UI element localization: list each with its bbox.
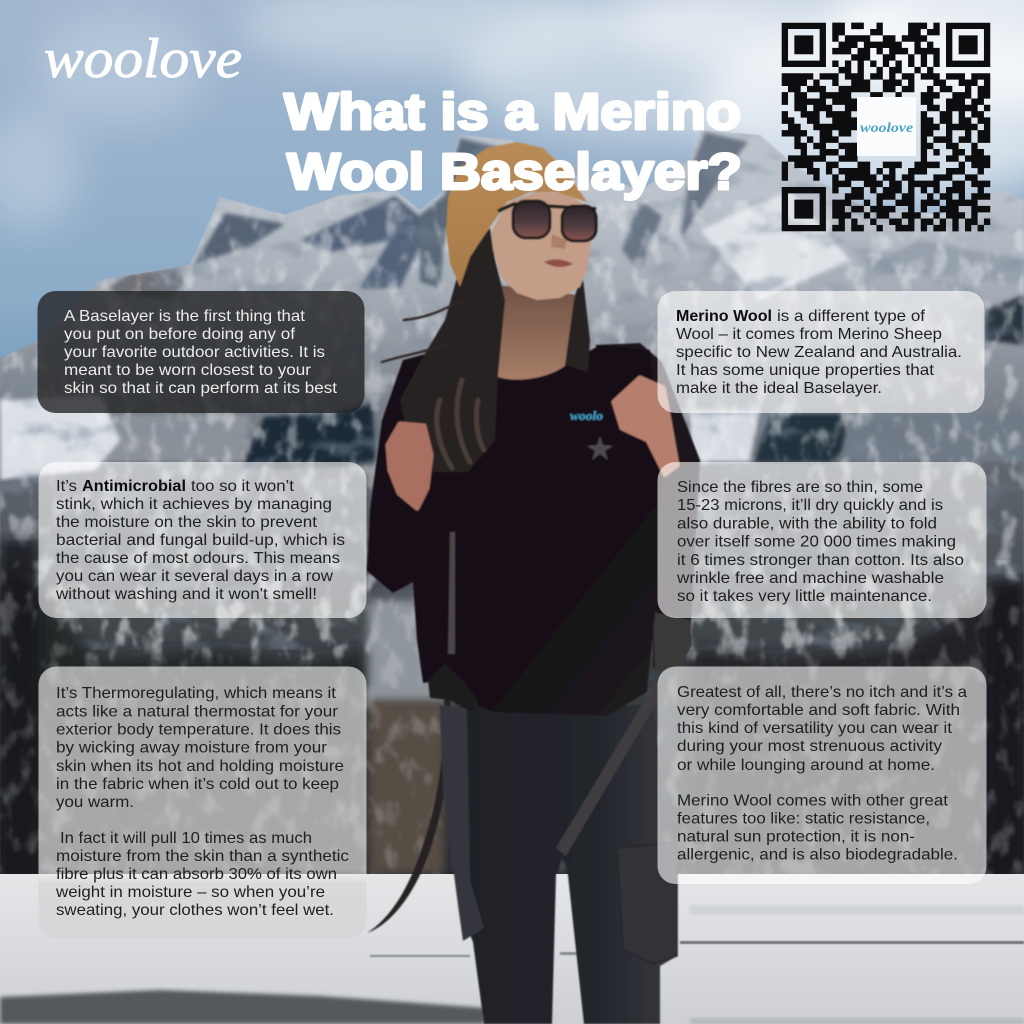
side pack strap [448,532,455,654]
mountains [0,130,1024,880]
panel: thermoregulating: exterior body temperature. It does this [56,722,341,739]
panel: antimicrobial: too so it won’t [191,478,295,495]
QR code [782,26,990,228]
panel: fibres and durability: Since the fibres are so thin, some [677,479,923,496]
panel: antimicrobial: the cause of most odours. This means [56,550,340,567]
panel: what a baselayer is: meant to be worn closest to your [64,362,311,379]
nose and lips [544,234,573,267]
title: Wool Baselayer? [287,143,742,200]
panel: fibres and durability: 15-23 microns, it’ll dry quickly and is [677,497,943,514]
frozen lake [0,874,1024,1024]
panel: comfort and other features: during your most strenuous activity [677,738,942,755]
panel: merino wool [658,291,984,413]
face [491,192,592,300]
panel: comfort and other features: this kind of versatility you can wear it [677,720,953,737]
panel: what a baselayer is: your favorite outdoor activities. It is [64,344,325,361]
woolove logo: woolove [44,28,242,90]
panel: thermoregulating: sweating, your clothes won’t feel wet. [56,902,334,919]
panel: comfort and other features: natural sun protection, it is non- [677,828,915,846]
QR centre logo [857,97,916,156]
QR modules [782,26,990,228]
panel: antimicrobial [38,462,366,618]
panel: merino wool: It has some unique properties that [676,362,935,379]
dark tree line [0,540,1024,880]
backpack and straps behind body [595,343,700,668]
panel: thermoregulating: In fact it will pull 10 times as much [60,830,312,847]
panel: antimicrobial: bacterial and fungal build-up, which is [56,532,345,549]
grey waist strap [440,705,484,941]
panel: what a baselayer is: A Baselayer is the first thing that [64,308,306,325]
sunglasses [498,201,596,241]
panel: antimicrobial: without washing and it won't smell! [55,586,317,603]
panel: antimicrobial: you can wear it several days in a row [56,568,334,585]
panel: fibres and durability: over itself some 20 000 times making [677,534,956,551]
panel: merino wool: Wool – it comes from Merino Sheep [676,326,942,343]
panel: comfort and other features: or while lounging around at home. [677,757,935,774]
panel: thermoregulating: acts like a natural thermostat for your [56,703,338,720]
panel: fibres and durability: wrinkle free and machine washable [676,570,944,587]
panel: what a baselayer is: you put on before doing any of [64,326,296,343]
left hand [388,424,431,508]
beanie hat [446,142,587,287]
neck [495,285,578,380]
panel: antimicrobial: It’s [56,478,77,495]
panel: comfort and other features: Merino Wool comes with other great [677,793,949,810]
panel: antimicrobial: Antimicrobial [82,478,186,495]
title: What is a Merino [284,83,741,140]
title [284,83,742,200]
diagonal strap [556,680,664,856]
panel: comfort and other features [658,666,986,884]
panel: comfort and other features: allergenic, and is also biodegradable. [677,846,958,864]
shirt logo: woolo [570,408,604,423]
panel: what a baselayer is: skin so that it can perform at its best [64,380,338,397]
panel: what a baselayer is [38,291,364,413]
panel: fibres and durability: also durable, with the ability to fold [677,516,937,532]
panel: merino wool: make it the ideal Baselayer. [676,380,882,397]
panel: thermoregulating: by wicking away moisture from your [56,740,327,757]
panel: thermoregulating [38,666,366,938]
panel: thermoregulating: in the fabric when it’s cold out to keep [56,776,339,793]
black sweater [367,345,662,716]
panel: thermoregulating: skin when its hot and holding moisture [56,758,344,775]
panel: thermoregulating: moisture from the skin than a synthetic [56,848,349,865]
panel: comfort and other features: very comfortable and soft fabric. With [677,702,960,719]
panel: fibres and durability [658,462,986,618]
panel: fibres and durability: so it takes very little maintenance. [677,588,932,605]
panel: merino wool: specific to New Zealand and Australia. [676,344,962,361]
sky [0,0,1024,420]
panel: thermoregulating: you warm. [56,794,134,811]
trousers [443,705,677,1024]
hair highlights and wisps [382,300,484,468]
hanging black strap [367,690,451,933]
clouds [0,0,1024,230]
back hair [400,228,590,472]
backpack side [653,612,692,672]
woman in merino baselayer [367,142,700,1024]
panel: thermoregulating: It’s Thermoregulating, which means it [56,685,337,702]
shirt star patch [587,436,613,460]
QR centre logo: woolove [860,121,913,136]
panel: comfort and other features: Greatest of all, there’s no itch and it’s a [677,684,967,701]
panel: merino wool: Merino Wool [676,308,772,325]
panel: comfort and other features: features too like: static resistance, [677,811,930,828]
right hand and forearm [614,378,677,474]
panel: antimicrobial: stink, which it achieves by managing [56,496,332,513]
panel: merino wool: is a different type of [777,308,926,325]
panel: thermoregulating: fibre plus it can absorb 30% of its own [56,866,337,883]
cargo pocket [617,842,677,964]
panel: antimicrobial: the moisture on the skin to prevent [56,514,318,531]
panel: thermoregulating: weight in moisture – so when you’re [55,884,325,901]
panel: fibres and durability: it 6 times stronger than cotton. Its also [677,552,964,569]
waist buckle [428,664,478,712]
